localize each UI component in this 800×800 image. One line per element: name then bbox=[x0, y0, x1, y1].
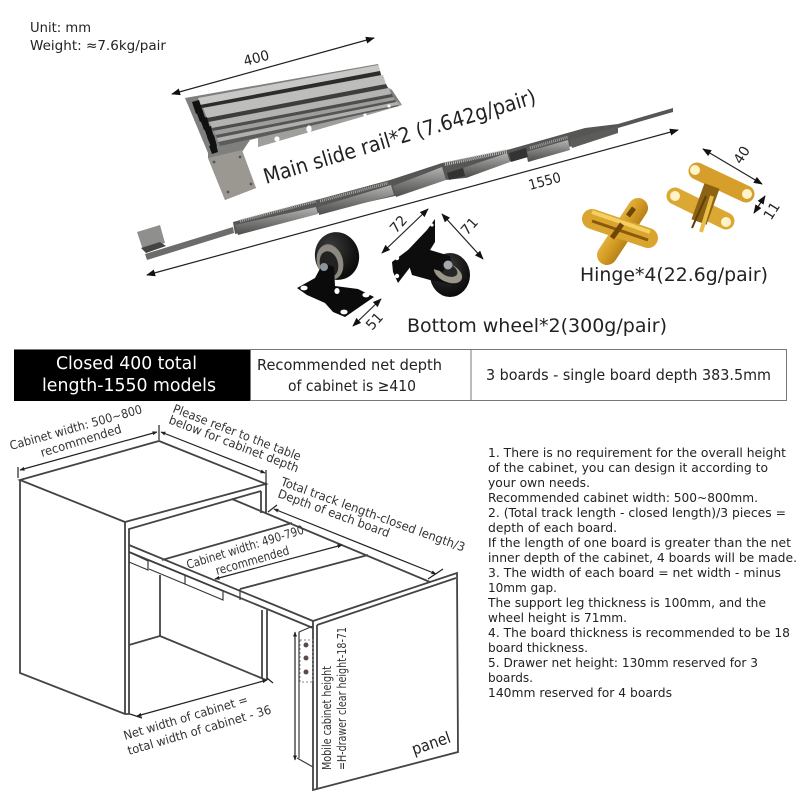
photo: closed hinge bbox=[592, 208, 650, 255]
label: hinge: Hinge*4(22.6g/pair) bbox=[580, 264, 768, 286]
unit and weight note bbox=[30, 20, 166, 54]
notes text block: wheel height is 71mm. bbox=[488, 611, 627, 626]
diagram labels: Cabinet width: 490-790 bbox=[185, 523, 306, 572]
diagram labels: total width of cabinet - 36 bbox=[126, 703, 273, 758]
diagram labels: Net width of cabinet = bbox=[122, 693, 249, 743]
diagram labels: recommended bbox=[39, 422, 123, 460]
dimension arrows: hinge sizes: 11 bbox=[761, 200, 784, 223]
pull-out boards and rail bbox=[129, 499, 430, 628]
specification table: length-1550 models bbox=[42, 375, 216, 396]
notes text block: 1. There is no requirement for the overall height bbox=[488, 446, 786, 461]
specification table: of cabinet is ≥410 bbox=[288, 377, 416, 395]
front panel bbox=[313, 573, 458, 790]
dimension arrow: 400 bbox=[172, 38, 374, 94]
diagram labels: recommended bbox=[214, 543, 291, 578]
notes text block: Recommended cabinet width: 500~800mm. bbox=[488, 491, 758, 506]
dimension arrows: wheel sizes: 71 bbox=[458, 215, 482, 239]
specification table: Closed 400 total bbox=[56, 353, 197, 374]
notes text block: board thickness. bbox=[488, 641, 588, 656]
dimension arrows: wheel sizes bbox=[353, 209, 483, 334]
photo: extended slide rail bbox=[137, 108, 673, 260]
notes text block: If the length of one board is greater than the net bbox=[488, 536, 791, 551]
photo: swivel wheel bbox=[297, 227, 374, 317]
notes text block: depth of each board. bbox=[488, 521, 617, 536]
dimension arrow: 1550 bbox=[147, 130, 678, 275]
diagram labels bbox=[8, 402, 467, 770]
specification table: Recommended net depth bbox=[257, 356, 442, 374]
notes text block: 140mm reserved for 4 boards bbox=[488, 686, 672, 701]
dimension arrow: 1550: 1550 bbox=[527, 170, 563, 194]
notes text block bbox=[487, 446, 797, 701]
diagram labels: below for cabinet depth bbox=[167, 413, 301, 475]
dimension arrows: hinge sizes: 40 bbox=[731, 144, 754, 167]
specification table: 3 boards - single board depth 383.5mm bbox=[486, 366, 771, 384]
unit and weight note: Weight: ≈7.6kg/pair bbox=[30, 38, 166, 54]
notes text block: your own needs. bbox=[488, 476, 590, 491]
diagram labels: Cabinet width: 500~800 bbox=[8, 402, 144, 453]
notes text block: 2. (Total track length - closed length)/3 pieces = bbox=[488, 506, 786, 521]
label: bottom wheel: Bottom wheel*2(300g/pair) bbox=[407, 315, 667, 337]
diagram labels: Please refer to the table bbox=[171, 402, 303, 464]
cabinet body bbox=[20, 441, 267, 714]
diagram labels: Mobile cabinet height bbox=[320, 666, 334, 770]
specification table bbox=[14, 349, 786, 401]
notes text block: 4. The board thickness is recommended to be 18 bbox=[488, 626, 790, 641]
notes text block: The support leg thickness is 100mm, and the bbox=[487, 596, 766, 611]
notes text block: 5. Drawer net height: 130mm reserved for 3 bbox=[488, 656, 758, 671]
drawer side and screws bbox=[297, 626, 313, 767]
photo: closed main slide rail bbox=[185, 64, 402, 200]
dimension arrow: 400: 400 bbox=[242, 48, 271, 70]
dimension arrows: wheel sizes: 72 bbox=[387, 213, 411, 237]
notes text block: of the cabinet, you can design it according to bbox=[488, 461, 768, 476]
diagram labels: Depth of each board bbox=[276, 487, 392, 540]
label: main slide rail: Main slide rail*2 (7.642g/pair) bbox=[261, 85, 539, 189]
diagram labels: panel bbox=[409, 728, 453, 759]
dimension arrows: hinge sizes bbox=[703, 144, 784, 223]
notes text block: boards. bbox=[488, 671, 533, 686]
notes text block: 3. The width of each board = net width - minus bbox=[488, 566, 781, 581]
unit and weight note: Unit: mm bbox=[30, 20, 91, 36]
dimension arrows: wheel sizes: 51 bbox=[363, 310, 387, 334]
notes text block: inner depth of the cabinet, 4 boards will be made. bbox=[488, 551, 797, 566]
diagram: cabinet with extended drawer bbox=[8, 402, 467, 790]
dimension lines bbox=[18, 425, 443, 760]
photo: open hinge bbox=[670, 165, 752, 232]
photo: fixed wheel bbox=[392, 219, 470, 297]
notes text block: 10mm gap. bbox=[488, 581, 557, 596]
diagram labels: Total track length-closed length/3 bbox=[278, 474, 467, 555]
diagram labels: =H-drawer clear height-18-71 bbox=[335, 627, 349, 770]
